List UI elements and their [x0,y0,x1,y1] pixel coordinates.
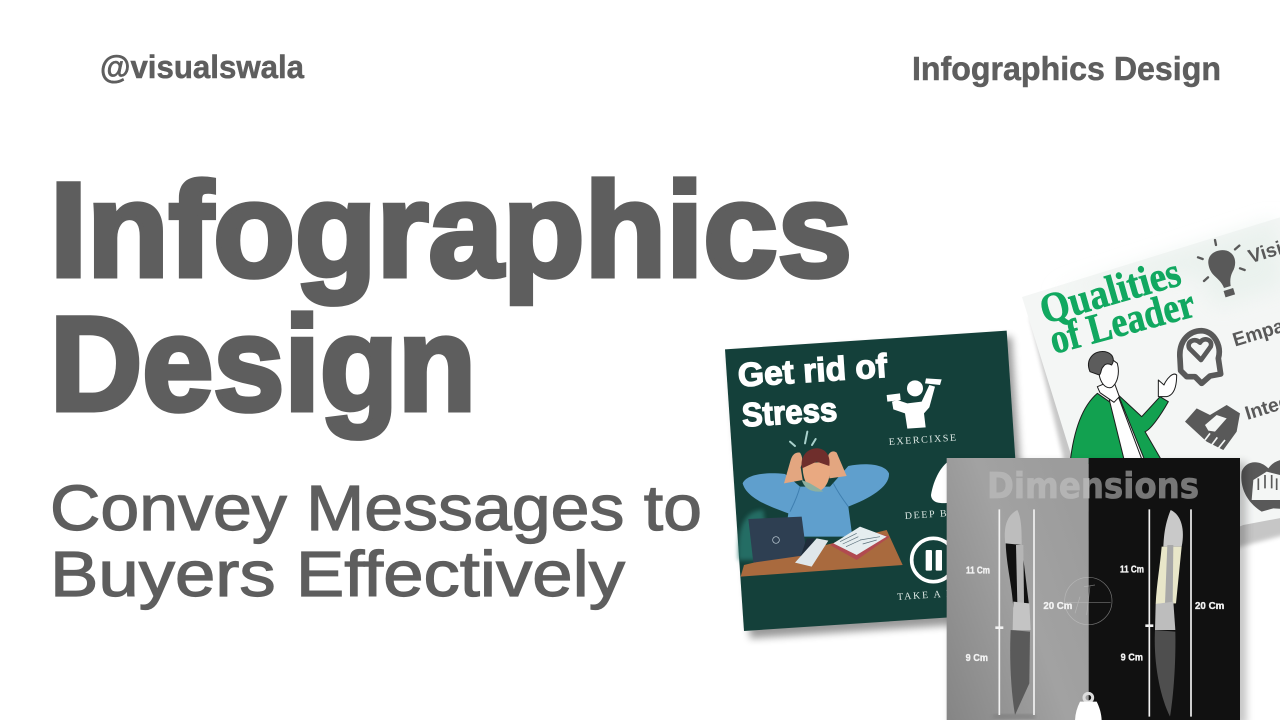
icon: light bulb [1198,240,1245,297]
black half [1089,458,1240,720]
logo watermark [1065,577,1112,625]
top right label: Infographics Design [912,50,1221,87]
heading: get rid of stress: Stress [741,391,838,435]
heading: get rid of stress [737,348,889,435]
dimension labels: 11 Cm [1120,565,1144,576]
title: Infographics [50,156,852,305]
heading: dimensions: Dimensions [987,466,1199,507]
icon: exercise figure [887,378,942,429]
label: exercise: EXERCIXSE [888,433,956,448]
icon: handshake [1185,405,1240,450]
knife: left [993,510,1035,718]
handle: @visualswala: @visualswala [100,49,304,85]
heading: qualities of leader: Qualities [1035,250,1186,334]
dimension labels: 20 Cm [1195,601,1224,612]
grey half [947,458,1089,720]
dimension labels: 11 Cm [966,565,990,576]
subtitle [50,472,702,610]
title [50,156,852,439]
subtitle: Convey Messages to [50,472,702,544]
illustration: leader in green jacket [1070,351,1177,463]
dimension labels: 9 Cm [966,653,988,664]
knife: right [1155,510,1183,717]
panel: get rid of stress [725,331,1031,638]
illustration: stressed man at desk [738,432,903,577]
dimension labels: 20 Cm [1043,601,1072,612]
panel: qualities of leader [1022,205,1280,581]
subtitle: Buyers Effectively [50,538,625,610]
icon: weight [1075,693,1102,720]
heading: qualities of leader: of Leader [1045,281,1200,364]
label: deep breathe: DEEP BREATHE [904,505,995,522]
panel: dimensions [947,458,1247,720]
title: Design [50,290,476,439]
measurement lines [995,509,1191,717]
icon: pause [912,538,955,582]
icon: heart in hands [1241,459,1280,512]
dimension labels: 9 Cm [1121,653,1143,664]
icon: head with heart [1180,331,1221,383]
dimension labels [966,565,1224,664]
heading: get rid of stress: Get rid of [737,348,889,395]
label: take a break: TAKE A BREAK [897,586,988,603]
icon: deep breathe [931,460,960,503]
